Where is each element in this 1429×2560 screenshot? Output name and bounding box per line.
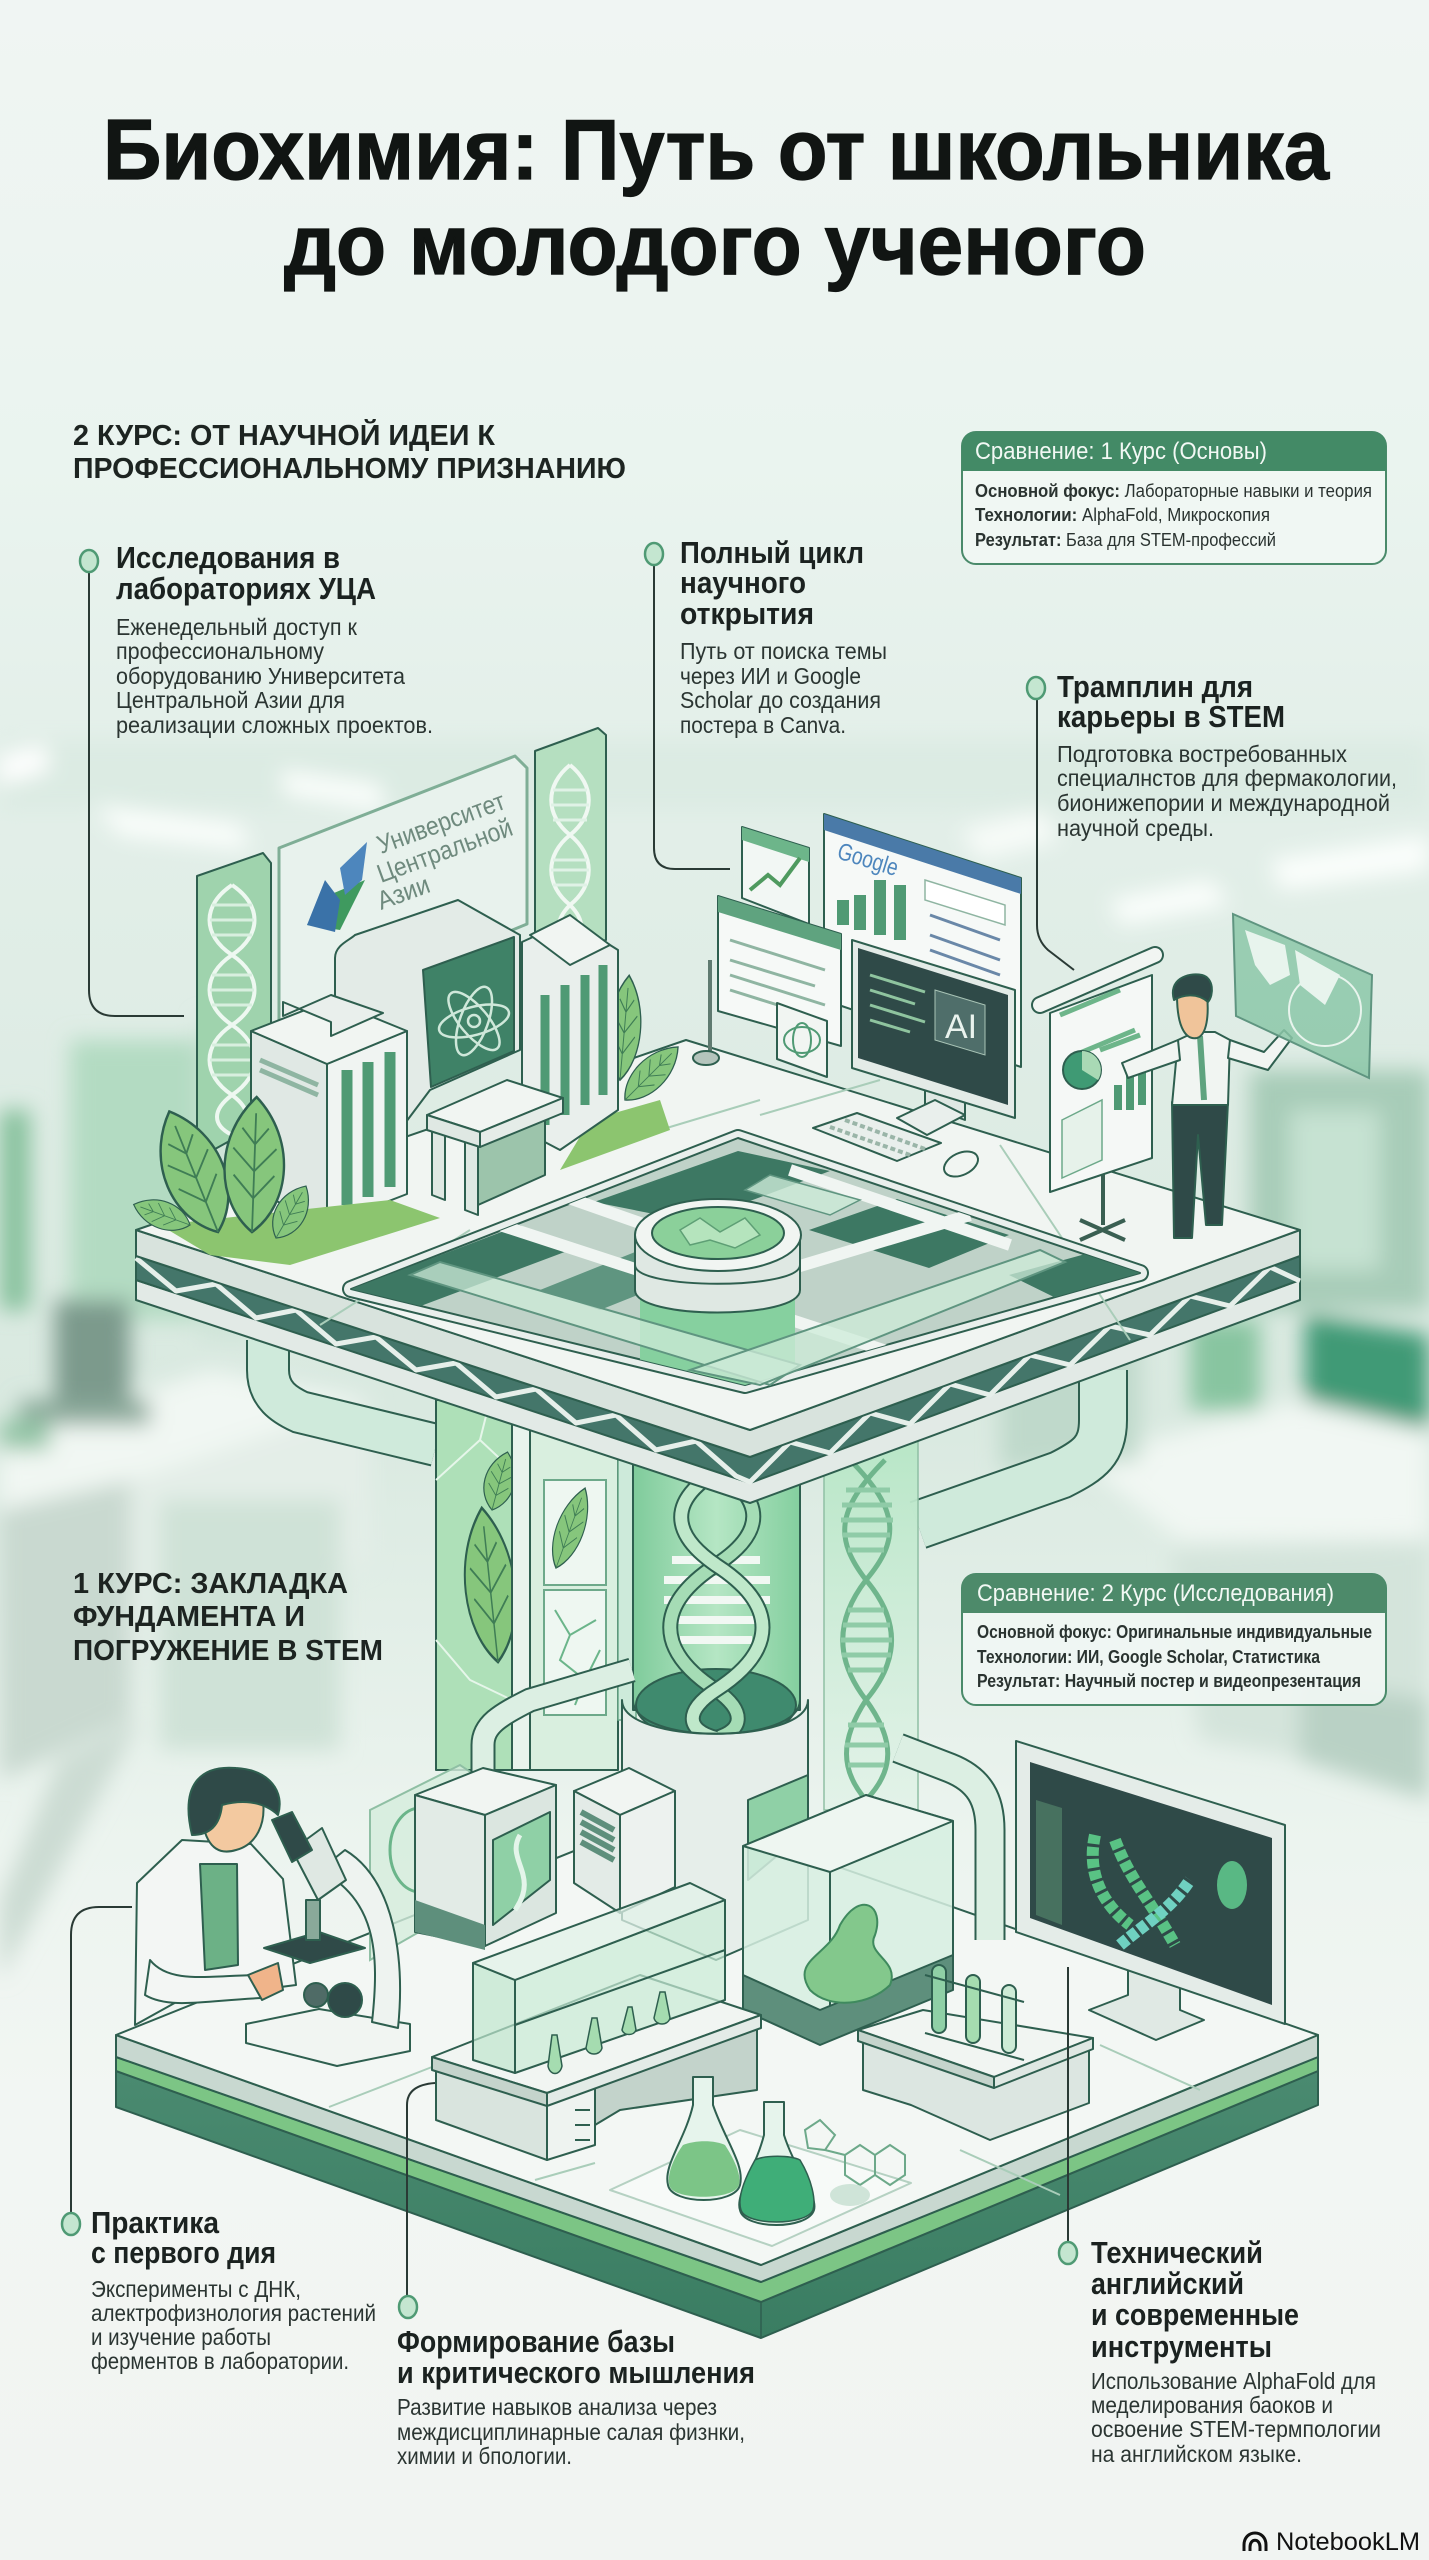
chart window [742,827,809,924]
lower platform [116,1810,1318,2338]
AI monitor [852,940,1015,1135]
central glass cylinder with DNA [622,1400,808,1960]
university building equipment [251,900,618,1225]
upper deck [136,1040,1300,1503]
comparison card: course 1: Результат: База для STEM-профессий [975,529,1276,550]
AI and Google screens [718,814,1021,1182]
callout: practice: алектрофизнология растений [91,2300,376,2326]
callout: STEM career [1027,669,1397,970]
callout: full research cycle: Путь от поиска темы [680,638,887,664]
callout: full research cycle: через ИИ и Google [680,663,861,689]
NotebookLM logo: NotebookLM [1276,2528,1420,2556]
university sign [197,728,606,1159]
callout: technical English: Использование AlphaFold для [1091,2368,1376,2394]
callout: technical English: меделирования баоков и [1091,2392,1333,2418]
presenter [1122,974,1292,1238]
callout: critical thinking [397,2083,755,2469]
callout: STEM career: Трамплин для [1057,669,1253,704]
pipe to left machine [483,1670,632,1790]
callout: practice: ферментов в лаборатории. [91,2348,349,2374]
left green panel with leaf [436,1400,523,1770]
right tower [522,915,618,1150]
callout: full research cycle: научного [680,565,806,600]
panel with leaf and cracks [512,1400,636,1770]
white lab coat [135,1840,296,2025]
atom icon [436,982,512,1060]
left tower [251,995,407,1225]
callout: STEM career: бионижепории и международной [1057,790,1390,816]
section heading: course 1: ФУНДАМЕНТА И [73,1601,305,1633]
left DNA panel [197,853,271,1159]
sign board [279,756,527,1026]
test tube table [858,1965,1093,2140]
callout: labs: Исследования в [116,540,340,575]
AI monitor: AI [945,1008,977,1046]
callout: technical English [1059,1967,1381,2467]
comparison card: course 1 [962,432,1386,564]
callout: practice: Практика [91,2205,220,2240]
callout: full research cycle: Полный цикл [680,535,864,570]
right DNA strip [824,1430,918,1810]
lab leaves behind building [560,974,689,1170]
grass and leaves [129,1096,440,1265]
section heading: course 2: 2 КУРС: ОТ НАУЧНОЙ ИДЕИ К [73,418,495,452]
face and hair [200,1790,263,1852]
pipe right to tank [898,1748,990,1940]
Google browser window [824,814,1021,1067]
browser window [718,896,841,1046]
section heading: course 1: 1 КУРС: ЗАКЛАДКА [73,1568,348,1600]
glass case [473,1883,725,2073]
section heading: course 2 [73,418,626,485]
scientist with microscope [135,1768,296,2025]
comparison card: course 1: Основной фокус: Лабораторные навыки и теория [975,480,1372,501]
left lab machine [415,1768,556,1950]
callout: STEM career: специалнстов для фермакологии, [1057,765,1397,791]
DNA helix [664,1455,770,1738]
callout: labs: реализации сложных проектов. [116,712,433,738]
callout: practice: и изучение работы [91,2324,271,2350]
title: до молодого ученого [284,198,1146,293]
Google browser window: Google [834,838,901,882]
callout: STEM career: карьеры в STEM [1057,699,1285,734]
callout: critical thinking: междисциплинарные салая физнки, [397,2419,745,2445]
callout: critical thinking: Формирование базы [397,2324,675,2359]
presentation board [1040,955,1155,1240]
logo [307,842,367,932]
microscope [246,1812,410,2066]
central opening with glass beams [351,1138,1140,1400]
cylinder cap with green culture [635,1199,801,1312]
central machine [335,900,520,1130]
callout: labs [80,540,433,1016]
callout: STEM career: Подготовка востребованных [1057,741,1347,767]
bench with glass case and flasks [432,1883,761,2160]
lower glass panel with pattern [370,1765,475,1960]
lamp stand [693,960,719,1065]
callout: technical English: инструменты [1091,2329,1272,2364]
callout: labs: лабораториях УЦА [116,571,376,606]
truss [136,1258,1300,1482]
section heading: course 2: ПРОФЕССИОНАЛЬНОМУ ПРИЗНАНИЮ [73,453,626,485]
callout: full research cycle: постера в Canva. [680,712,846,738]
title: Биохимия: Путь от школьника [103,103,1330,198]
callout: labs: оборудованию Университета [116,663,405,689]
pipes under the upper deck [268,1340,1103,1525]
sign board: Центральной [373,812,516,889]
comparison card: course 1: Сравнение: 1 Курс (Основы) [975,438,1267,465]
comparison card: course 2: Результат: Научный постер и видеопрезентация [977,1670,1361,1691]
world map panel [1233,914,1372,1078]
sign board: Университет [373,786,509,860]
callout: full research cycle: Scholar до создания [680,687,881,713]
callout: labs: профессиональному [116,638,324,664]
server tower [574,1768,675,1913]
sign board: Азии [373,869,434,916]
callout: technical English: Технический [1091,2235,1263,2270]
callout: full research cycle: открытия [680,596,814,631]
atom card [777,1003,827,1077]
callout: critical thinking: Развитие навыков анализа через [397,2394,717,2420]
callout: labs: Еженедельный доступ к [116,614,358,640]
callout: technical English: освоение STEM-термпологии [1091,2416,1381,2442]
right DNA panel [535,728,606,960]
callout: critical thinking: и критического мышления [397,2355,755,2390]
protein monitor [1016,1741,1285,2040]
title [103,103,1330,293]
callout: technical English: английский [1091,2266,1244,2301]
hand [248,1963,283,2000]
glass tank with protein [743,1795,953,2045]
keyboard and mouse [813,1113,982,1182]
comparison card: course 2: Технологии: ИИ, Google Scholar, Статистика [977,1646,1321,1667]
comparison card: course 1: Технологии: AlphaFold, Микроскопия [975,504,1270,525]
small desk [427,1080,563,1215]
comparison card: course 2 [962,1574,1386,1705]
callout: technical English: и современные [1091,2297,1299,2332]
callout: STEM career: научной среды. [1057,815,1214,841]
callout: practice [62,1907,376,2374]
callout: critical thinking: химии и бпологии. [397,2443,572,2469]
section heading: course 1 [73,1568,383,1667]
callout: technical English: на английском языке. [1091,2441,1302,2467]
callout: practice: Эксперименты с ДНК, [91,2276,301,2302]
callout: full research cycle [645,535,887,869]
callout: labs: Центральной Азии для [116,687,345,713]
section heading: course 1: ПОГРУЖЕНИЕ В STEM [73,1635,383,1667]
flasks and molecule [667,2077,905,2225]
column glass panels [436,1400,918,1810]
callout: practice: с первого дия [91,2235,276,2270]
comparison card: course 2: Сравнение: 2 Курс (Исследования) [977,1580,1334,1607]
